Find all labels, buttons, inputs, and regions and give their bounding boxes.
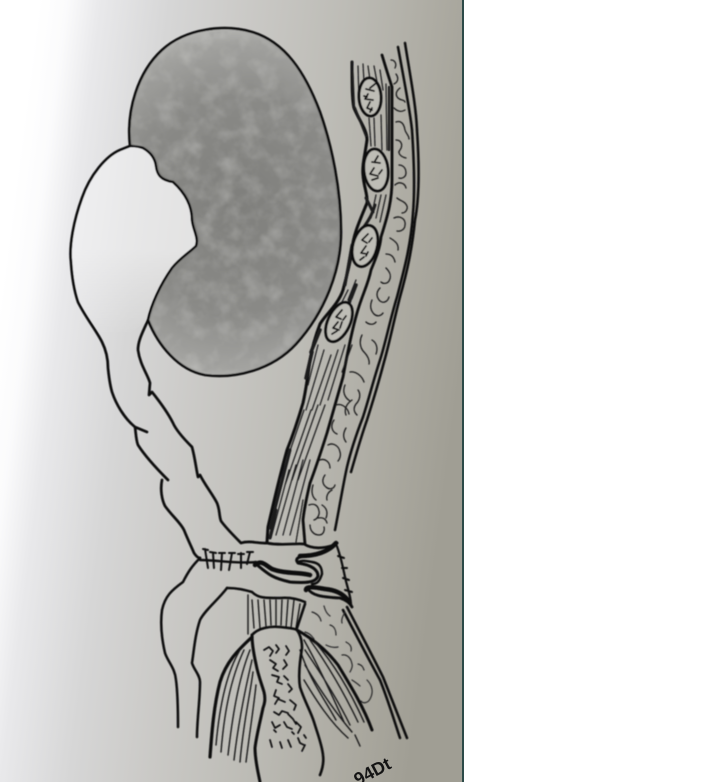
bladder / uterine body — [252, 627, 323, 782]
kidney — [129, 28, 341, 376]
nerve bundles: ovals — [320, 77, 390, 346]
fascia double line — [335, 43, 419, 530]
lower fat with fascia — [305, 606, 407, 738]
muscle fibre hatching — [270, 62, 389, 542]
lower muscle fans — [210, 630, 372, 762]
anastomosis lumen — [255, 543, 352, 607]
peritoneal edge sutures — [336, 544, 352, 605]
perirenal fat squiggles upper — [309, 60, 409, 535]
dark scan edge — [462, 0, 464, 782]
outer lower tube walls — [161, 558, 305, 737]
renal pelvis and upper ureter — [70, 146, 334, 558]
lower muscle block — [248, 595, 305, 634]
panel: scanned paper background — [0, 0, 463, 782]
upper muscle column — [267, 55, 392, 544]
sutures at anastomosis — [200, 549, 256, 570]
